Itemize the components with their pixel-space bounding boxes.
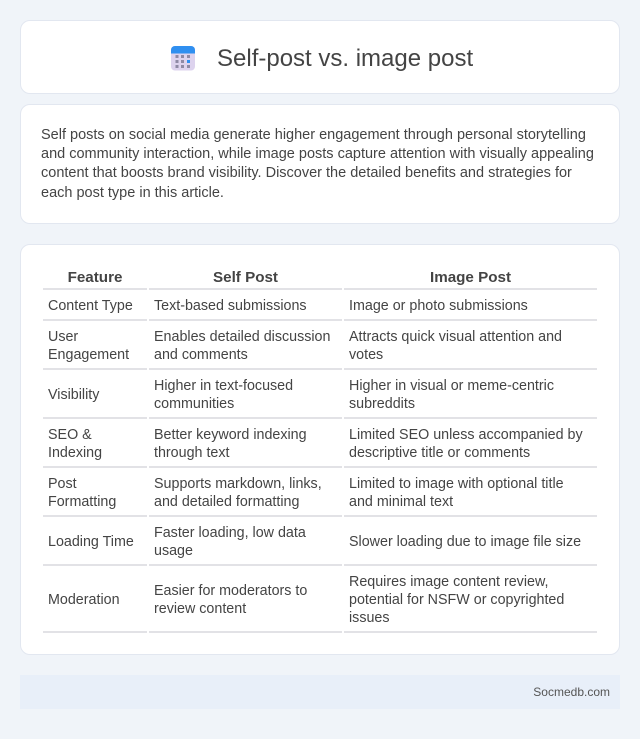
panel: table card — [20, 244, 620, 655]
cell: self post moderation — [154, 583, 307, 617]
row: SEO & Indexing: Indexing — [48, 445, 102, 461]
cell: image post engagement: votes — [349, 347, 383, 363]
cell: image post visibility: Higher in visual or meme-centric — [349, 378, 554, 394]
cell: image post formatting — [349, 476, 564, 510]
cell: self post loading: Faster loading, low data — [154, 525, 306, 541]
cell: self post moderation: Easier for moderators to — [154, 583, 307, 599]
cell: self post visibility: Higher in text-focused — [154, 378, 293, 394]
cell: self post engagement: and comments — [154, 347, 248, 363]
title: Self-post vs. image post — [217, 45, 473, 72]
cell: self post formatting: and detailed formatting — [154, 494, 299, 510]
cell: image post formatting: Limited to image with optional title — [349, 476, 564, 492]
cell: self post SEO: Better keyword indexing — [154, 427, 307, 443]
cell: image post loading: Slower loading due to image file size — [349, 534, 581, 550]
panel: title card — [20, 20, 620, 94]
row: Content Type: Content Type — [48, 298, 133, 314]
cell: self post loading — [154, 525, 306, 559]
cell: self post SEO — [154, 427, 307, 461]
cell: image post SEO: Limited SEO unless accompanied by — [349, 427, 583, 443]
cell: image post SEO: descriptive title or comments — [349, 445, 530, 461]
cell: image post formatting: and minimal text — [349, 494, 453, 510]
cell: image post moderation: potential for NSFW or copyrighted — [349, 592, 564, 608]
intro text: content that boosts brand visibility. Discover the detailed benefits and strategies for — [41, 165, 572, 181]
cell: image post visibility: subreddits — [349, 396, 415, 412]
footer text: Socmedb.com — [533, 685, 610, 699]
table header: Feature: Feature — [68, 269, 122, 286]
row: Loading Time: Loading Time — [48, 534, 134, 550]
row: User Engagement — [48, 329, 129, 363]
cell: image post moderation: issues — [349, 610, 390, 626]
row: User Engagement: Engagement — [48, 347, 129, 363]
panel: introduction card — [20, 104, 620, 224]
cell: image post SEO — [349, 427, 583, 461]
cell: self post moderation: review content — [154, 601, 246, 617]
cell: image post visibility — [349, 378, 554, 412]
row: Post Formatting — [48, 476, 116, 510]
row: User Engagement: User — [48, 329, 78, 345]
intro text — [41, 127, 594, 201]
cell: self post visibility: communities — [154, 396, 234, 412]
row: Moderation: Moderation — [48, 592, 120, 608]
cell: image post engagement: Attracts quick visual attention and — [349, 329, 562, 345]
table header: Image Post: Image Post — [430, 269, 511, 286]
cell: self post content type: Text-based submissions — [154, 298, 307, 314]
cell: image post engagement — [349, 329, 562, 363]
cell: self post loading: usage — [154, 543, 193, 559]
cell: image post moderation — [349, 574, 564, 626]
cell: image post content type: Image or photo submissions — [349, 298, 528, 314]
table header: Self Post: Self Post — [213, 269, 278, 286]
cell: self post formatting: Supports markdown, links, — [154, 476, 322, 492]
cell: image post moderation: Requires image content review, — [349, 574, 548, 590]
row: Post Formatting: Post — [48, 476, 77, 492]
cell: self post engagement — [154, 329, 330, 363]
row: SEO & Indexing: SEO & — [48, 427, 92, 443]
row: Post Formatting: Formatting — [48, 494, 116, 510]
intro text: and community interaction, while image posts capture attention with visually appealing — [41, 146, 594, 162]
row: SEO & Indexing — [48, 427, 102, 461]
cell: self post visibility — [154, 378, 293, 412]
intro text: each post type in this article. — [41, 185, 224, 201]
row: Visibility: Visibility — [48, 387, 99, 403]
cell: self post SEO: through text — [154, 445, 230, 461]
intro text: Self posts on social media generate higher engagement through personal storytelling — [41, 127, 586, 143]
footer bar — [20, 675, 620, 709]
cell: self post engagement: Enables detailed discussion — [154, 329, 330, 345]
cell: self post formatting — [154, 476, 322, 510]
icon: calendar — [171, 46, 195, 70]
